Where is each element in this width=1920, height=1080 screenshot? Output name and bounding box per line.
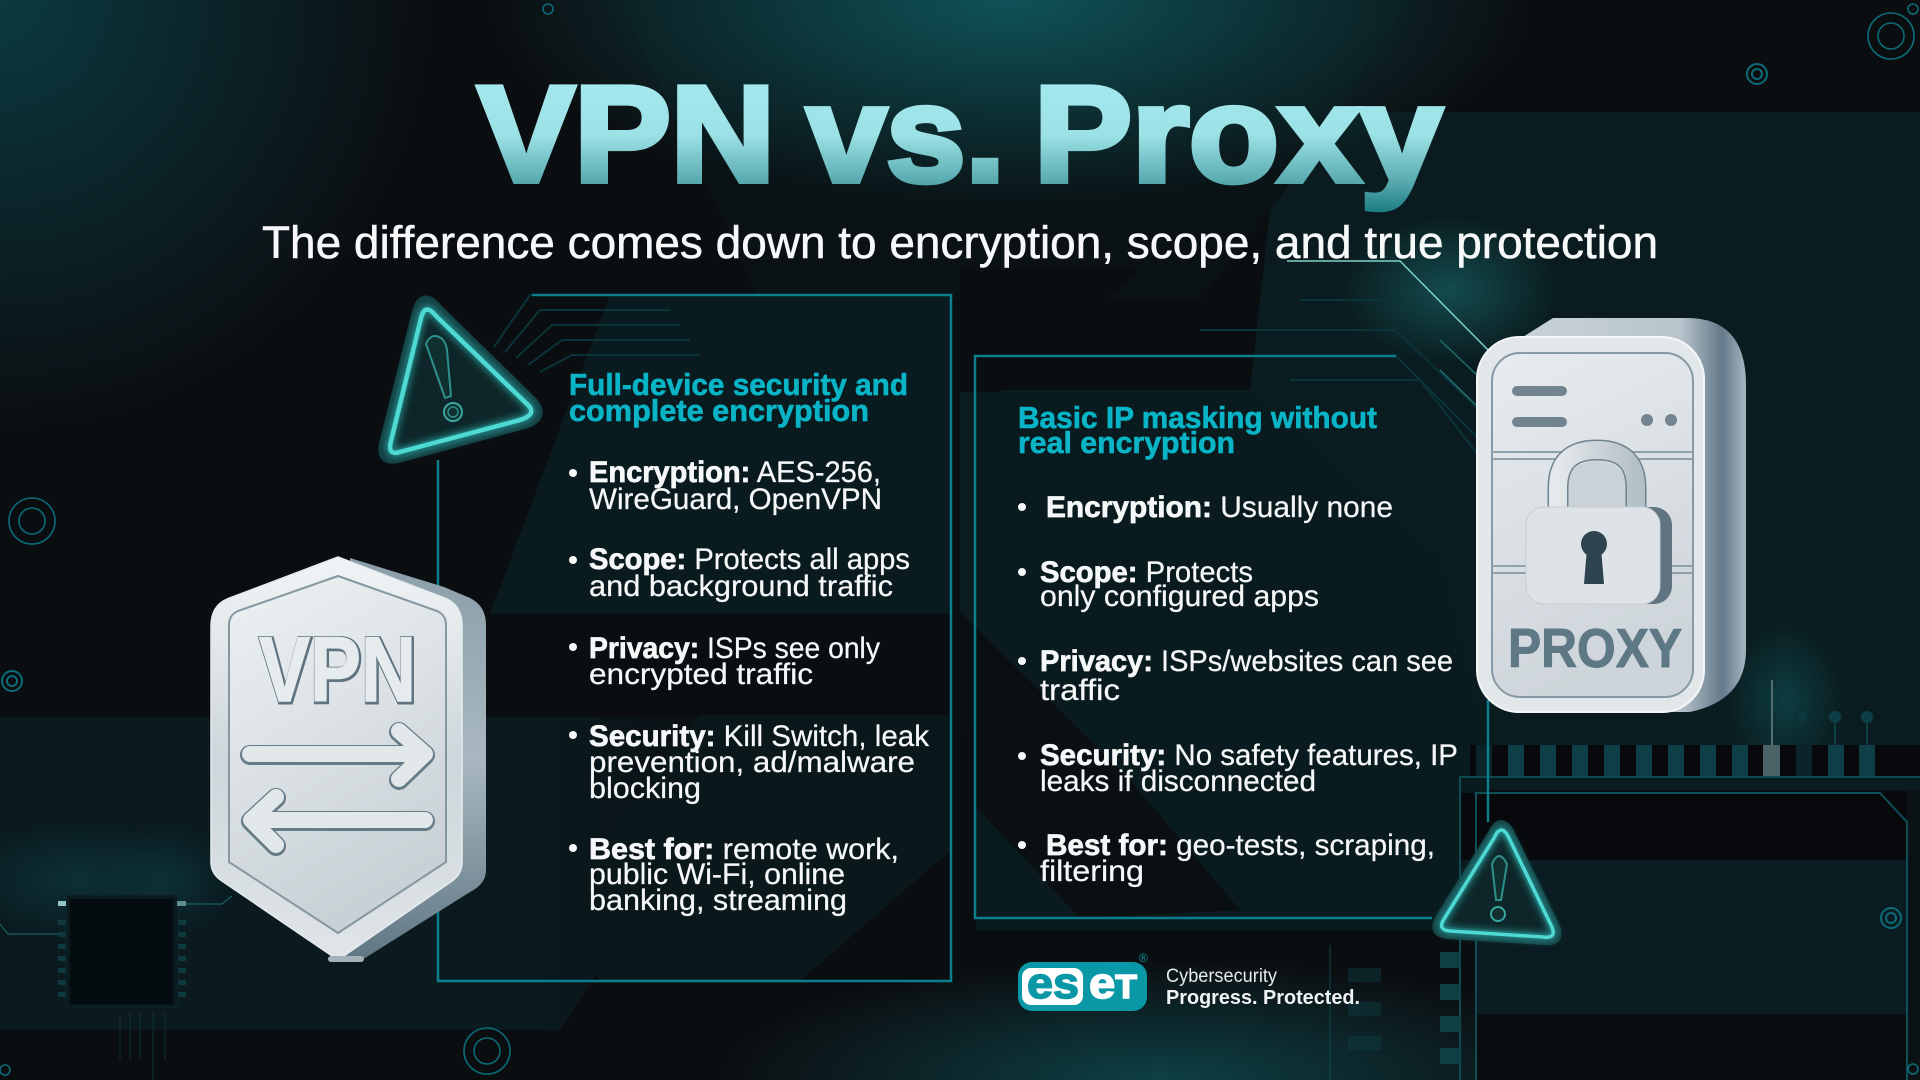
heading: VPN: complete encryption <box>569 393 869 428</box>
shield side <box>338 558 486 960</box>
bullet: best for <box>569 833 899 917</box>
bullet: best for: banking, streaming <box>589 884 847 917</box>
title: Proxy <box>1034 58 1442 210</box>
bullet: best for <box>1018 829 1435 888</box>
padlock <box>1526 450 1672 604</box>
status dots <box>1641 414 1677 426</box>
bullet: security: Security: Kill Switch, leak <box>589 720 930 753</box>
heading: Proxy <box>1018 400 1377 460</box>
bullet: best for: filtering <box>1040 855 1144 888</box>
panel frame <box>438 295 951 981</box>
arrow: right <box>250 731 425 780</box>
bullet: scope <box>569 543 910 603</box>
bullet: scope: Scope: Protects <box>1040 556 1253 589</box>
bullet: scope: only configured apps <box>1040 580 1319 613</box>
bullet: scope: Scope: Protects all apps <box>589 543 910 576</box>
bullet: encryption: Encryption: AES-256, <box>589 456 881 489</box>
heading: VPN <box>569 367 908 428</box>
icon: Proxy server with padlock <box>1477 318 1746 712</box>
bullet: privacy <box>1018 645 1453 707</box>
server face <box>1477 337 1704 712</box>
bullet: security <box>569 720 930 805</box>
panel: Proxy <box>975 356 1488 918</box>
tagline: Progress. Protected. <box>1166 987 1360 1009</box>
shield face <box>211 557 462 960</box>
bullet: security: Security: No safety features, IP <box>1040 739 1458 772</box>
bullet: privacy: Privacy: ISPs/websites can see <box>1040 645 1453 678</box>
bullet: scope: and background traffic <box>589 570 893 603</box>
heading: Proxy: Basic IP masking without <box>1018 400 1377 435</box>
proxy label: PROXY <box>1508 617 1682 679</box>
bullet: scope <box>1018 556 1319 613</box>
panel frame <box>975 356 1488 918</box>
bullet: encryption <box>569 456 882 516</box>
logo: ESET <box>1018 951 1148 1011</box>
bullet: privacy <box>569 632 880 691</box>
bullet: encryption: Encryption: Usually none <box>1046 491 1393 524</box>
circuit chip <box>0 895 232 1080</box>
logo: ESET: ® <box>1139 951 1148 965</box>
panel: VPN <box>438 295 951 981</box>
shield base nub <box>328 956 364 962</box>
server inner plate <box>1492 353 1693 697</box>
bullet: encryption: WireGuard, OpenVPN <box>589 483 882 516</box>
bullet: security: leaks if disconnected <box>1040 765 1316 798</box>
tagline: Cybersecurity <box>1166 966 1277 987</box>
bullet: security: blocking <box>589 772 701 805</box>
title <box>478 58 1442 210</box>
shield label: VPN <box>260 620 417 722</box>
vent bars <box>1512 386 1567 427</box>
icon: warning triangle left <box>385 302 536 457</box>
heading: Proxy: real encryption <box>1018 425 1235 460</box>
shield label: VPN <box>259 619 416 721</box>
tagline <box>1166 966 1360 1009</box>
shield inner plate <box>229 576 446 933</box>
heading: VPN: Full-device security and <box>569 367 908 402</box>
bullet: privacy: traffic <box>1040 674 1120 707</box>
bullet: security <box>1018 739 1458 798</box>
bullet: privacy: Privacy: ISPs see only <box>589 632 880 665</box>
icon: warning triangle right <box>1438 826 1556 939</box>
icon: VPN shield <box>211 557 486 962</box>
arrow: left <box>251 797 425 846</box>
bullet: best for: public Wi-Fi, online <box>589 858 845 891</box>
dividers <box>1492 451 1693 574</box>
bullet: security: prevention, ad/malware <box>589 746 915 779</box>
bullet: privacy: encrypted traffic <box>589 658 813 691</box>
logo: ESET: es <box>1027 959 1079 1008</box>
bullet: best for: Best for: remote work, <box>589 833 899 866</box>
logo: ESET: eT <box>1089 959 1137 1008</box>
subtitle: The difference comes down to encryption, scope, and true protection <box>262 217 1658 268</box>
bullet: best for: Best for: geo-tests, scraping, <box>1046 829 1435 862</box>
server side <box>1510 318 1746 712</box>
title: VPN <box>478 58 775 210</box>
title: vs. <box>807 58 1005 210</box>
